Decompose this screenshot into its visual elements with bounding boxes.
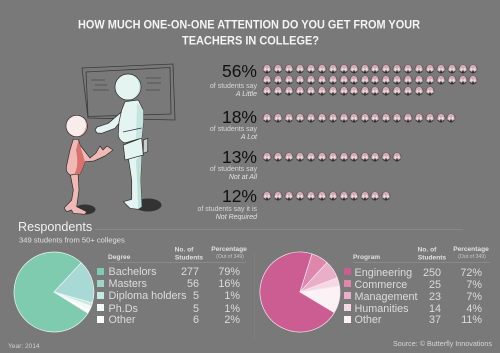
degree swatches xyxy=(97,268,104,323)
stat: 56% A Little xyxy=(210,61,477,98)
program table: Management xyxy=(354,291,418,303)
degree table: 5 xyxy=(193,303,199,315)
respondents heading: 349 students from 50+ colleges xyxy=(19,236,125,244)
year note: Year: 2014 xyxy=(8,343,40,350)
stat: 18% A Lot xyxy=(210,107,455,141)
program table: (Out of 349) xyxy=(458,254,486,260)
stat: 56% A Little: of students say xyxy=(210,83,257,90)
degree table: Masters xyxy=(108,278,147,290)
degree table: Students xyxy=(175,254,203,262)
degree table: 5 xyxy=(193,290,199,302)
program table: Program xyxy=(353,254,380,261)
teacher xyxy=(95,74,148,209)
stat: 13% Not at All xyxy=(210,147,401,181)
blackboard xyxy=(82,64,175,120)
program table: Other xyxy=(354,314,382,326)
program table: 25 xyxy=(429,279,441,291)
program table: Humanities xyxy=(354,303,409,315)
program table xyxy=(344,246,490,326)
stat: 13% Not at All: 13% xyxy=(222,147,257,167)
degree table: 277 xyxy=(181,266,199,278)
program table: 7% xyxy=(466,279,482,291)
program table: 14 xyxy=(429,303,441,315)
stat: 56% A Little: 56% xyxy=(222,61,257,81)
program table: 250 xyxy=(423,267,441,279)
degree table: 1% xyxy=(224,290,240,302)
program table: 72% xyxy=(460,267,482,279)
program table: Percentage xyxy=(453,246,489,253)
degree table: No. of xyxy=(175,246,194,254)
program table: 23 xyxy=(429,291,441,303)
icon row: 18% xyxy=(263,114,455,122)
title: HOW MUCH ONE-ON-ONE ATTENTION DO YOU GET FROM YOUR xyxy=(78,18,420,32)
stat: 18% A Lot: 18% xyxy=(222,107,257,127)
degree table: Degree xyxy=(108,254,131,261)
program table: Engineering xyxy=(354,267,412,279)
student xyxy=(64,115,113,214)
teacher shadow xyxy=(134,198,162,212)
icon row: 12% xyxy=(263,192,390,200)
stat: 12% Not Required: of students say it is xyxy=(197,206,257,213)
stat: 13% Not at All: Not at All xyxy=(229,174,257,181)
icon row: 13% xyxy=(263,153,401,161)
degree table: 56 xyxy=(187,278,199,290)
degree table: Diploma holders xyxy=(108,290,187,302)
degree table: 16% xyxy=(218,278,240,290)
program table: Commerce xyxy=(354,279,407,291)
program table: Students xyxy=(418,254,446,262)
source note: Source: © Butterfly Innovations xyxy=(393,340,492,348)
program pie chart xyxy=(260,252,340,332)
student shadow xyxy=(74,204,96,214)
icon row: 56% xyxy=(263,65,477,95)
illustration: teacher and student at a board xyxy=(64,64,175,214)
degree pie chart xyxy=(14,252,94,332)
stat: 56% A Little: A Little xyxy=(235,91,257,98)
stat: 12% Not Required xyxy=(197,186,390,221)
title: TEACHERS IN COLLEGE? xyxy=(182,34,319,48)
degree table: 2% xyxy=(224,314,240,326)
program table: 11% xyxy=(461,314,482,326)
program table: No. of xyxy=(418,246,437,254)
stat: 12% Not Required: Not Required xyxy=(216,214,258,221)
degree table: Bachelors xyxy=(108,266,157,278)
degree table: Other xyxy=(108,314,136,326)
degree table: Percentage xyxy=(211,246,247,253)
respondents heading: Respondents xyxy=(18,220,92,234)
degree table: 1% xyxy=(224,303,240,315)
program table: 37 xyxy=(429,314,441,326)
degree table: Ph.Ds xyxy=(108,303,139,315)
title xyxy=(78,18,420,48)
program table: 4% xyxy=(466,303,482,315)
stat: 13% Not at All: of students say xyxy=(210,166,257,173)
degree table: 6 xyxy=(193,314,199,326)
program table: 7% xyxy=(466,291,482,303)
stat: 18% A Lot: A Lot xyxy=(240,134,258,141)
program swatches xyxy=(344,268,351,323)
respondents heading xyxy=(18,220,125,244)
stat: 18% A Lot: of students say xyxy=(210,126,257,133)
degree table: 79% xyxy=(218,266,240,278)
degree table xyxy=(97,246,247,326)
stat: 12% Not Required: 12% xyxy=(222,186,257,206)
degree table: (Out of 349) xyxy=(216,254,244,260)
